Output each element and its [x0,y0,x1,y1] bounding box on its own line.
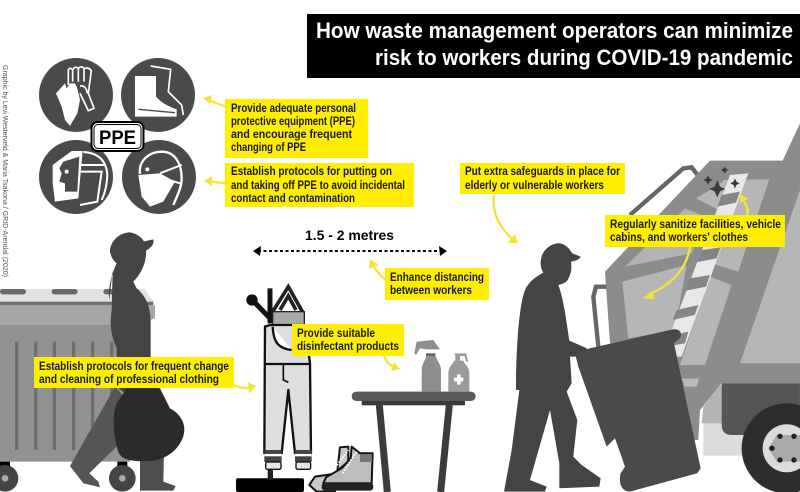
icon: gloves [39,58,113,132]
arrow: to disinfectant products [384,356,400,371]
icon: face shield [39,140,113,214]
garbage bag [114,388,184,461]
callout: disinfectant: Provide suitable [297,326,375,340]
callout: distancing: Enhance distancing [390,270,484,284]
bin: left container [0,289,155,492]
callout: disinfectant [292,324,404,356]
callout: clothing [34,357,234,388]
table with disinfectant bottles [352,340,476,492]
callout: adequate PPE: and encourage frequent [231,127,352,141]
title [307,14,800,78]
arrow: to truck top [739,194,749,215]
credit text: Graphic by Levi Westerveld & Maria Tsakona / GRID-Arendal (2020) [1,65,10,277]
callout: elderly workers [460,163,625,194]
callout: adequate PPE: Provide adequate personal [231,101,356,115]
callout: elderly workers: elderly or vulnerable workers [465,178,604,192]
arrow: to PPE shield and mask [204,176,227,186]
wheelie bin [575,329,701,492]
arrow: to truck cabin [643,247,690,299]
callout: putting on PPE [225,163,414,207]
arrow: to PPE gloves and boots [203,95,227,107]
pump bottle [448,353,469,392]
spray bottle [414,340,441,392]
callout: adequate PPE: protective equipment (PPE) [231,114,355,128]
arrow: to overalls [234,382,256,394]
figure: overalls on stand [236,287,312,492]
arrow: to worker [494,195,518,243]
distance label [253,227,447,256]
callout: putting on PPE: Establish protocols for putting on [231,164,392,178]
callout: putting on PPE: and taking off PPE to avoid incidental [231,178,405,192]
icon: boot [121,58,195,132]
callout: disinfectant: disinfectant products [297,339,399,353]
callout: adequate PPE: changing of PPE [231,140,306,154]
callout: distancing: between workers [390,283,472,297]
callout: elderly workers: Put extra safeguards in place for [465,164,620,178]
callout: clothing: and cleaning of professional clothing [39,372,219,386]
arrow: to distance line [369,259,386,280]
panel: PPE icons [39,58,196,214]
callout: distancing [385,268,489,300]
striped ladder [662,173,748,357]
figure: man pushing bin [504,243,701,492]
sparkles [703,167,740,197]
callout: putting on PPE: contact and contamination [231,191,355,205]
icon: boots [309,447,373,492]
callout: sanitize [605,215,785,247]
callout: sanitize: cabins, and workers' clothes [610,230,748,244]
callout: clothing: Establish protocols for frequent change [39,359,229,373]
figure: woman carrying bag [70,232,184,491]
callout: adequate PPE [225,99,368,158]
badge: PPE [92,122,144,151]
badge: PPE: PPE [99,128,136,149]
icon: face mask [122,140,196,214]
distance label: 1.5 - 2 metres [305,227,394,243]
garbage truck [593,123,800,492]
